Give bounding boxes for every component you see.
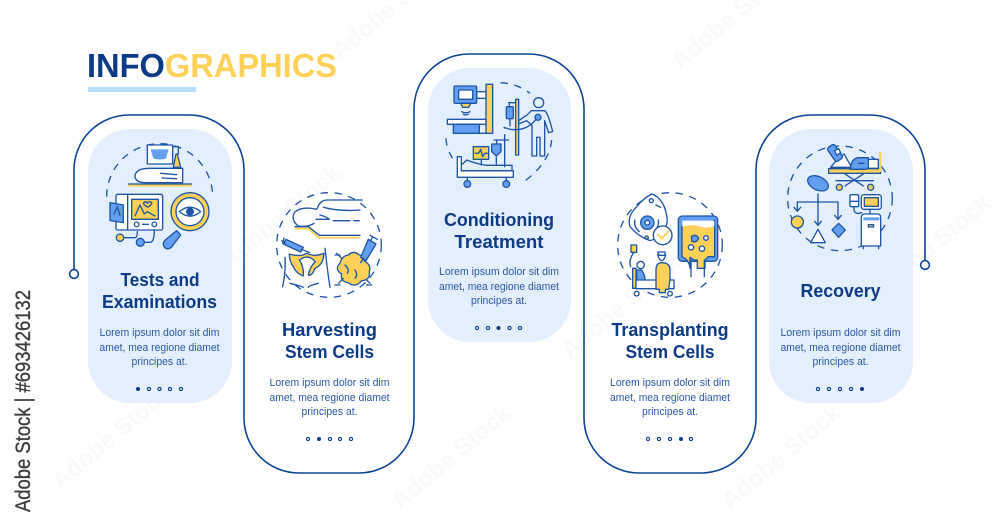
text: tests and examinations: amet, mea regione diamet [100, 342, 220, 354]
pagination dots 2 [306, 437, 353, 441]
text: harvesting stem cells: Stem Cells [285, 342, 374, 362]
panel backgrounds [88, 68, 913, 403]
text: recovery: amet, mea regione diamet [780, 342, 900, 354]
text: recovery: Recovery [800, 281, 880, 301]
text: Adobe Stock [387, 399, 517, 515]
pagination dots 1 [136, 387, 183, 391]
text: tests and examinations [100, 270, 220, 368]
text: transplanting stem cells: amet, mea regione diamet [610, 392, 730, 404]
text: transplanting stem cells: Lorem ipsum dolor sit dim [610, 377, 730, 389]
text: harvesting stem cells: Harvesting [282, 320, 377, 340]
text: Adobe Stock [217, 159, 347, 275]
text: conditioning treatment: principes at. [471, 295, 527, 307]
icon: conditioning treatment [446, 83, 553, 187]
end node [921, 261, 929, 269]
text: conditioning treatment: amet, mea regione diamet [439, 281, 559, 293]
text: harvesting stem cells [270, 320, 390, 418]
pagination dots 4 [646, 437, 693, 441]
text: Adobe Stock [867, 189, 997, 305]
text: tests and examinations: Tests and [120, 270, 200, 290]
text: tests and examinations: principes at. [132, 356, 188, 368]
text: conditioning treatment [439, 210, 559, 307]
text: Adobe Stock [557, 249, 687, 365]
text: transplanting stem cells: principes at. [642, 406, 698, 418]
text: tests and examinations: Lorem ipsum dolor sit dim [100, 327, 220, 339]
stock id vertical text: Adobe Stock | #693426132 [12, 290, 35, 512]
text: transplanting stem cells [610, 320, 730, 418]
text: Adobe Stock [47, 379, 177, 495]
text: harvesting stem cells: principes at. [302, 406, 358, 418]
text: conditioning treatment: Conditioning [444, 210, 554, 230]
start node [70, 270, 78, 278]
title: INFOGRAPHICS [87, 48, 337, 85]
text: Adobe Stock [717, 399, 847, 515]
connecting outline [74, 54, 925, 473]
pagination dots 3 [475, 326, 522, 330]
text: recovery: principes at. [812, 356, 868, 368]
text: harvesting stem cells: amet, mea regione diamet [270, 392, 390, 404]
text: recovery [780, 281, 900, 368]
text: harvesting stem cells: Lorem ipsum dolor sit dim [270, 377, 390, 389]
text: transplanting stem cells: Stem Cells [626, 342, 714, 362]
text: tests and examinations: Examinations [102, 292, 217, 312]
text: recovery: Lorem ipsum dolor sit dim [780, 327, 900, 339]
pagination dots 5 [816, 387, 864, 391]
text: conditioning treatment: Lorem ipsum dolor sit dim [439, 266, 559, 278]
icon: harvesting stem cells [277, 193, 381, 297]
text: conditioning treatment: Treatment [454, 232, 544, 252]
icon: transplanting stem cells [618, 193, 722, 297]
icon: recovery [788, 144, 892, 251]
icon: tests and examinations [107, 144, 213, 249]
text: transplanting stem cells: Transplanting [612, 320, 728, 340]
